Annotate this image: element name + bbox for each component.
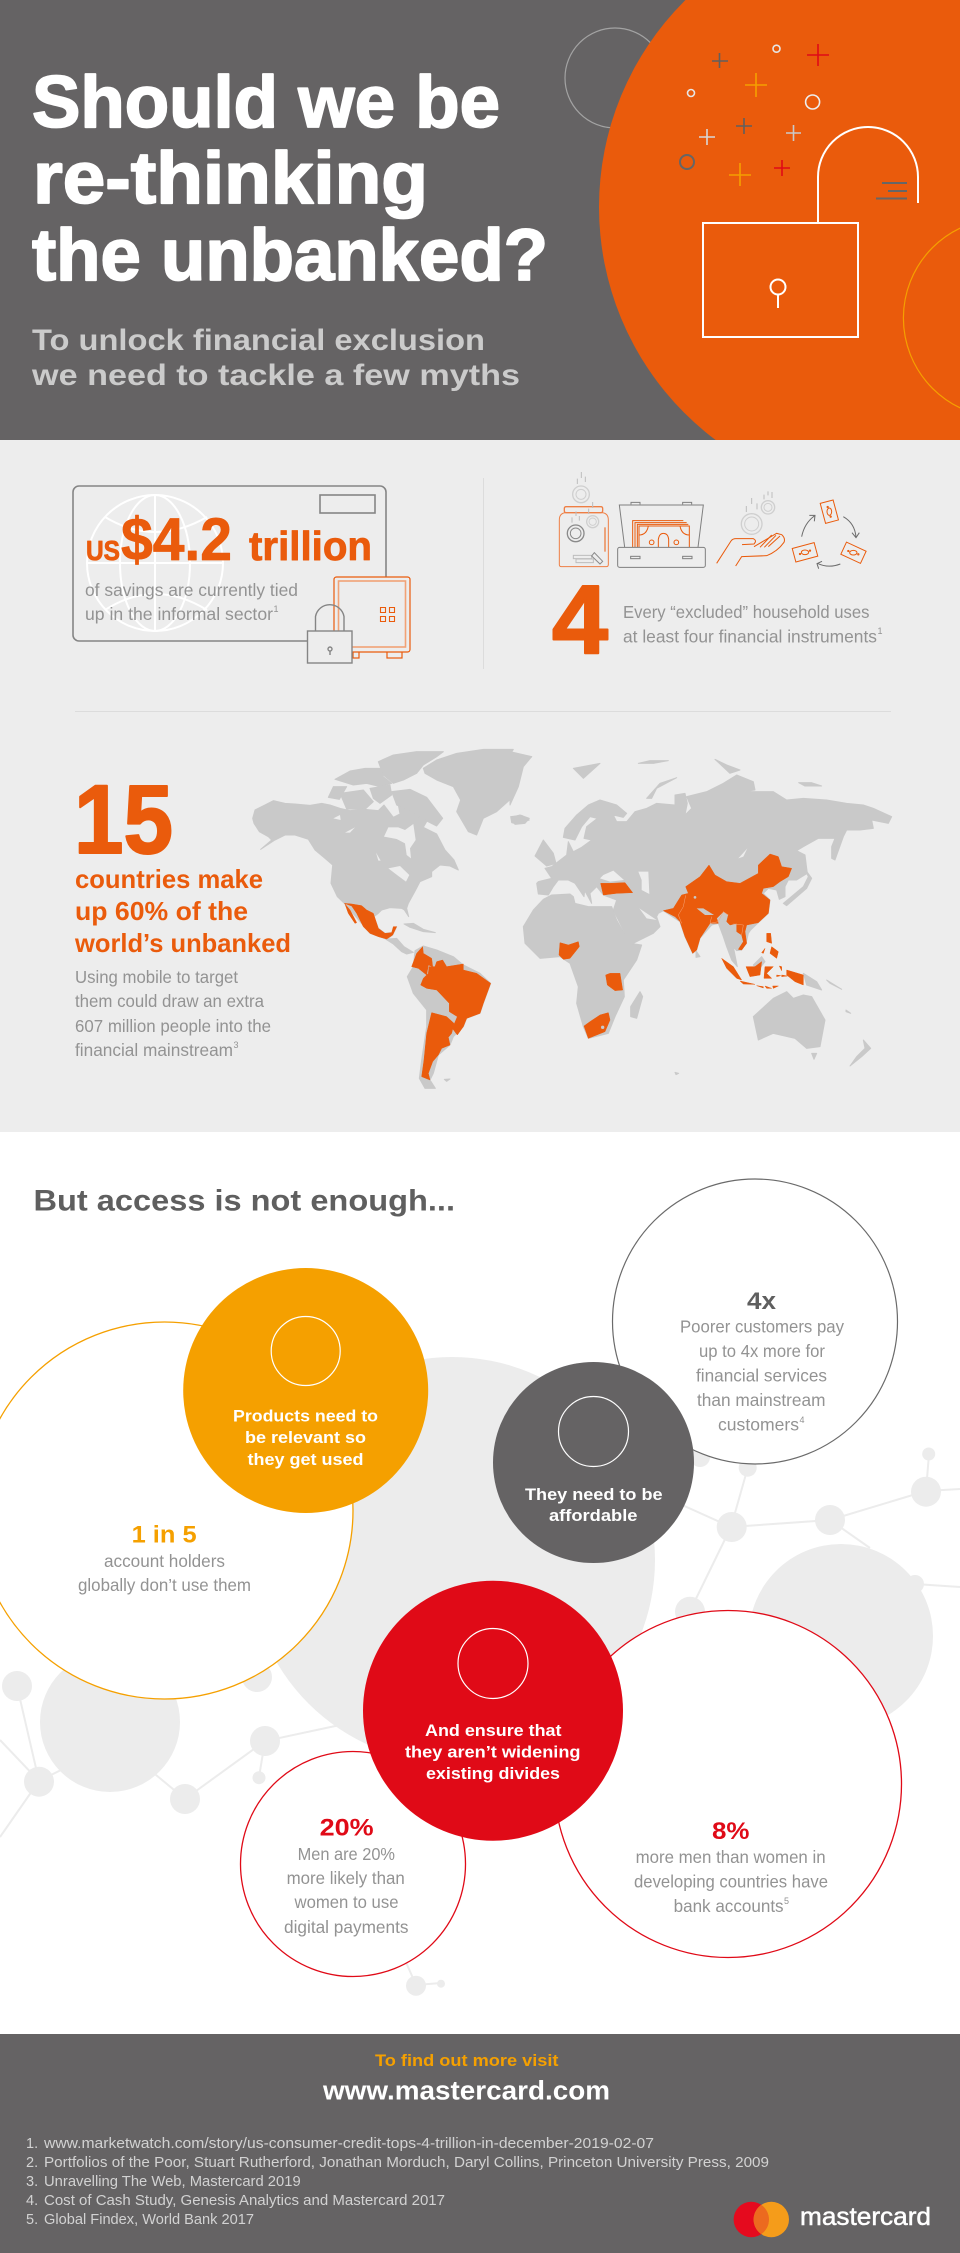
divider xyxy=(483,478,484,669)
references: Unravelling The Web, Mastercard 2019 xyxy=(44,2174,301,2190)
call to action xyxy=(322,2051,610,2105)
icon group: four instruments xyxy=(559,472,866,569)
call to action: To find out more visit xyxy=(375,2051,559,2070)
callout: 1 in 5: account holders xyxy=(104,1551,225,1571)
text: mobile: them could draw an extra xyxy=(75,991,264,1011)
panel: but access is not enough xyxy=(0,1179,960,1996)
heading: countries: countries make xyxy=(75,864,263,894)
circle: affordable: affordable xyxy=(549,1506,638,1525)
callout: 8%: bank accounts xyxy=(674,1896,784,1916)
circle: widening divides: And ensure that xyxy=(425,1721,562,1740)
divider xyxy=(75,711,891,712)
text: instruments description: Every “excluded” household uses xyxy=(623,602,870,622)
circle: products relevant: they get used xyxy=(248,1450,364,1469)
stat: 4: 4 xyxy=(552,565,608,674)
subtitle xyxy=(31,324,520,392)
logo: mastercard: mastercard xyxy=(800,2203,931,2231)
title: re-thinking xyxy=(33,138,428,219)
icon: open padlock xyxy=(703,127,918,337)
background network xyxy=(0,1357,960,1996)
circle: affordable: They need to be xyxy=(525,1485,663,1504)
circle: products relevant: Products need to xyxy=(233,1407,378,1426)
icon: briefcase xyxy=(618,502,705,567)
icon: jar xyxy=(559,472,608,567)
stat: us$4.2 trillion: US xyxy=(86,535,120,566)
map: eurasia africa oceania xyxy=(510,752,892,1075)
callout: 4x xyxy=(612,1179,898,1464)
world map xyxy=(253,749,892,1088)
text: mobile xyxy=(75,967,271,1060)
borders and enclaves xyxy=(678,895,743,935)
references: 5. xyxy=(26,2212,38,2228)
call to action: www.mastercard.com xyxy=(322,2075,610,2105)
callout: 4x: up to 4x more for xyxy=(699,1341,825,1361)
callout: 20%: more likely than xyxy=(287,1868,405,1888)
callout: 8%: developing countries have xyxy=(634,1872,828,1892)
callout: 8% xyxy=(554,1610,902,1958)
text: instruments description: 1 xyxy=(878,626,883,636)
callout: 4x: financial services xyxy=(696,1366,827,1386)
callout: 8%: more men than women in xyxy=(636,1847,826,1867)
text: savings description: up in the informal sector xyxy=(85,604,273,624)
references: Global Findex, World Bank 2017 xyxy=(44,2212,254,2228)
callout: 8%: 5 xyxy=(784,1896,789,1906)
icon: sparkles xyxy=(680,44,907,198)
references: Portfolios of the Poor, Stuart Rutherford, Jonathan Morduch, Daryl Collins, Princeton University Press, 2009 xyxy=(44,2155,769,2171)
icon: money cycle xyxy=(792,500,866,569)
callout: 20%: women to use xyxy=(294,1892,398,1912)
references: 1. xyxy=(26,2136,38,2152)
icon: padlock xyxy=(308,605,352,663)
callout: 1 in 5: 1 in 5 xyxy=(132,1522,197,1549)
icon: globe xyxy=(87,495,223,631)
inland seas xyxy=(600,848,747,920)
stat: us$4.2 trillion: trillion xyxy=(249,523,372,569)
circle: widening divides: existing divides xyxy=(426,1764,560,1783)
text: mobile: financial mainstream xyxy=(75,1040,233,1060)
highlighted: mexico, colombia, brazil, argentina xyxy=(344,903,491,1080)
circle: widening divides xyxy=(363,1581,623,1841)
icon: hand with coins xyxy=(717,491,784,566)
text: instruments description xyxy=(623,602,883,646)
text: mobile: 607 million people into the xyxy=(75,1016,271,1036)
panel: financial instruments xyxy=(552,472,883,674)
heading: countries: up 60% of the xyxy=(75,896,248,926)
callout: 20%: Men are 20% xyxy=(298,1844,395,1864)
stat: 15: 15 xyxy=(74,765,173,874)
title: the unbanked? xyxy=(32,215,548,296)
stat: us$4.2 trillion: $4.2 xyxy=(121,506,232,573)
references: www.marketwatch.com/story/us-consumer-credit-tops-4-trillion-in-december-2019-02-07 xyxy=(43,2136,654,2152)
circle: products relevant xyxy=(183,1268,428,1513)
references: Cost of Cash Study, Genesis Analytics and Mastercard 2017 xyxy=(44,2193,445,2209)
callout: 20%: 20% xyxy=(320,1815,374,1842)
references xyxy=(26,2136,769,2228)
panel: header xyxy=(0,0,960,440)
panel: 15 countries text xyxy=(74,765,291,1060)
circle: products relevant: be relevant so xyxy=(245,1428,366,1447)
circle: affordable xyxy=(493,1362,694,1563)
logo: mastercard xyxy=(734,2202,931,2237)
references: 3. xyxy=(26,2174,38,2190)
callout: 20% xyxy=(240,1752,466,1976)
heading: countries xyxy=(74,864,291,958)
heading: But access is not enough... xyxy=(34,1185,455,1218)
callout: 4x: customers xyxy=(718,1415,799,1435)
callout: 4x: 4x xyxy=(747,1288,777,1315)
text: savings description xyxy=(85,580,298,624)
heading: countries: world’s unbanked xyxy=(74,928,291,958)
subtitle: we need to tackle a few myths xyxy=(31,359,520,392)
references: 2. xyxy=(26,2155,38,2171)
subtitle: To unlock financial exclusion xyxy=(32,324,485,357)
bays and lakes xyxy=(333,815,416,882)
text: savings description: 1 xyxy=(274,604,279,614)
circle: widening divides: they aren’t widening xyxy=(405,1743,580,1762)
references: 4. xyxy=(26,2193,38,2209)
text: mobile: 3 xyxy=(234,1040,239,1050)
title: Should we be xyxy=(32,62,500,143)
icon: safe xyxy=(334,577,410,658)
callout: 4x: 4 xyxy=(800,1415,805,1425)
highlighted: asia and africa countries xyxy=(559,854,803,1038)
text: mobile: Using mobile to target xyxy=(75,967,238,987)
title xyxy=(32,62,548,296)
callout: 1 in 5 xyxy=(0,1322,353,1699)
text: savings description: of savings are currently tied xyxy=(85,580,298,600)
callout: 4x: Poorer customers pay xyxy=(680,1317,844,1337)
callout: 4x: than mainstream xyxy=(697,1390,826,1410)
stat: us$4.2 trillion xyxy=(86,506,372,573)
map: americas xyxy=(253,749,532,1088)
callout: 1 in 5: globally don’t use them xyxy=(78,1575,251,1595)
callout: 20%: digital payments xyxy=(284,1917,409,1937)
panel: footer xyxy=(0,2034,960,2253)
panel: myths background xyxy=(0,440,960,1132)
text: instruments description: at least four financial instruments xyxy=(623,626,877,646)
callout: 8%: 8% xyxy=(712,1818,750,1845)
panel: savings card xyxy=(73,486,410,663)
